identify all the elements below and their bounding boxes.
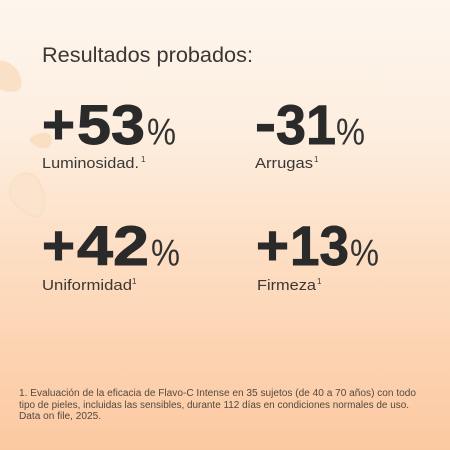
stat: uniformidad: 1 <box>132 277 137 286</box>
drop: small <box>30 133 51 148</box>
serum drops <box>0 62 51 216</box>
stat: uniformidad: 42 <box>77 214 149 277</box>
stat: arrugas: Arrugas <box>255 155 313 172</box>
stat: firmeza <box>256 214 379 294</box>
stat: arrugas: - <box>255 91 276 154</box>
drop: large <box>10 173 44 216</box>
stat: arrugas: 1 <box>314 155 319 164</box>
stat: firmeza: 13 <box>290 214 349 277</box>
stat: arrugas: 31 <box>276 93 336 156</box>
stat: luminosidad <box>42 92 176 172</box>
stat: uniformidad <box>42 214 180 294</box>
title: Resultados probados: <box>42 43 253 67</box>
stat: luminosidad: % <box>147 112 176 152</box>
stat: luminosidad: 53 <box>77 93 145 156</box>
footnote: 1. Evaluación de la eficacia de Flavo-C Intense en 35 sujetos (de 40 a 70 años) con todo <box>19 388 416 399</box>
stat: firmeza: % <box>350 232 379 274</box>
stat: uniformidad: Uniformidad <box>42 277 132 294</box>
stat: luminosidad: + <box>42 92 75 156</box>
stat: firmeza: 1 <box>317 277 322 286</box>
stat: arrugas: % <box>336 112 365 152</box>
stat: luminosidad: 1 <box>141 155 146 164</box>
stat: luminosidad: Luminosidad. <box>42 155 139 172</box>
stat: firmeza: Firmeza <box>257 277 317 294</box>
stat: arrugas <box>255 91 365 172</box>
stat: uniformidad: % <box>151 232 180 274</box>
stat: firmeza: + <box>256 214 289 276</box>
footnote: Data on file, 2025. <box>19 411 101 422</box>
footnote <box>19 388 416 422</box>
stat: uniformidad: + <box>42 214 75 276</box>
footnote: tipo de pieles, incluidas las sensibles, durante 112 días en condiciones normales de uso. <box>19 400 409 411</box>
drop: top left <box>0 62 21 91</box>
